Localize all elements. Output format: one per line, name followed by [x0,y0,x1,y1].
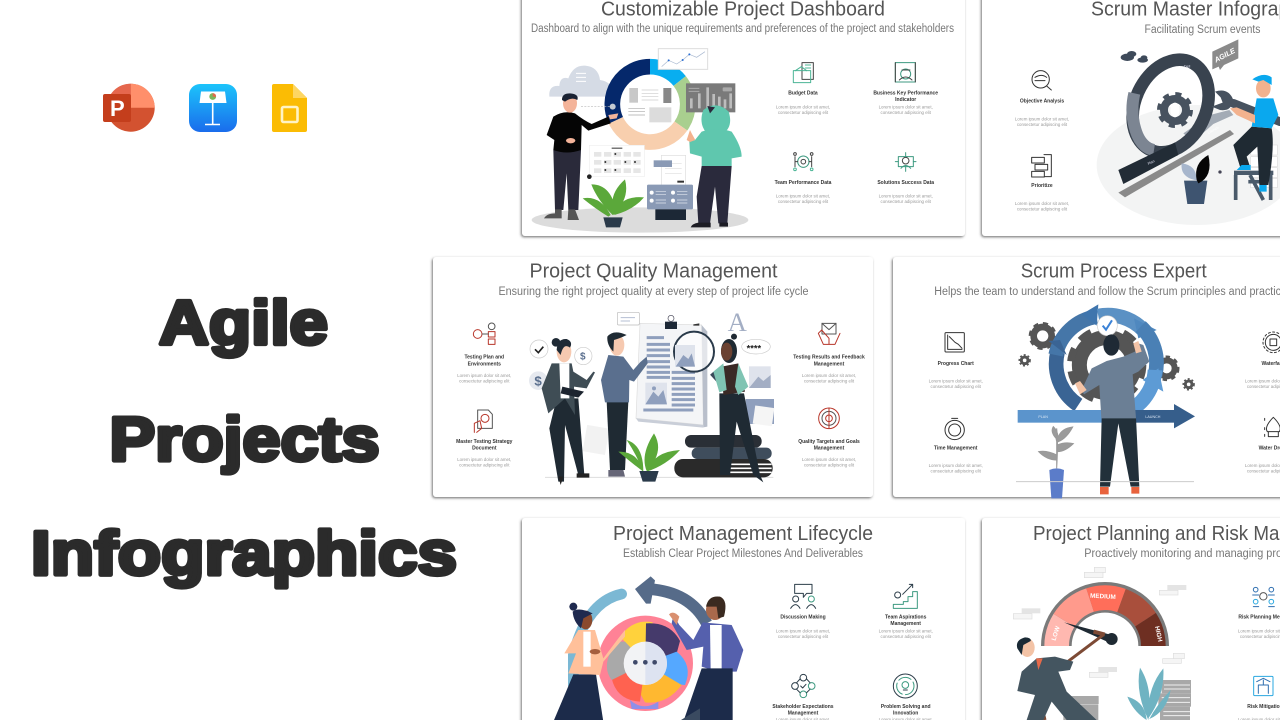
item: Team Aspirations Management: Management [890,621,921,627]
item: Time Management [929,418,983,474]
item: Progress Chart: Lorem ipsum dolor sit amet, [929,379,983,384]
title: Project Quality Management [530,260,778,282]
subtitle: Ensuring the right project quality at every step of project life cycle [498,286,808,298]
item: Progress Chart: Progress Chart [938,361,974,367]
item: Stakeholder Expectations Management: Management [788,710,819,716]
item: Objective Analysis [1015,71,1069,127]
item: Solutions Success Data [877,153,934,204]
title: Scrum Process Expert [1021,260,1207,282]
item: Business Key Performance Indicator [873,63,938,115]
item: Time Management: Lorem ipsum dolor sit amet, [929,463,983,468]
item: Discussion Making [776,584,830,639]
title: Project Management Lifecycle [613,523,873,545]
icon: risk mitigation [1254,676,1273,696]
item: Prioritize: Prioritize [1031,183,1053,189]
icon: aspirations [893,584,917,608]
item: Stakeholder Expectations Management [772,674,834,720]
item: Solutions Success Data: Solutions Success Data [877,180,934,186]
icon: KPI [895,63,915,82]
item: Testing Plan and Environments: Environments [468,361,501,367]
item: Team Aspirations Management: Team Aspirations [885,614,927,620]
item: Master Testing Strategy Document: Master Testing Strategy [456,439,513,445]
item: Prioritize: Lorem ipsum dolor sit amet, [1015,201,1069,206]
icon: Keynote [189,84,237,132]
illustration: scrum process: LAUNCH [1145,415,1161,419]
item: Team Aspirations Management: Lorem ipsum dolor sit amet, [879,628,933,633]
item: Testing Results and Feedback Management: consectetur adipiscing elit [804,378,855,383]
item: Discussion Making: Lorem ipsum dolor sit amet, [776,628,830,633]
item: Master Testing Strategy Document: consectetur adipiscing elit [459,462,510,468]
illustration: quality team: **** [747,343,762,353]
item: Problem Solving and Innovation: Innovation [893,710,918,716]
item: Prioritize [1015,155,1069,211]
item: Time Management: consectetur adipiscing elit [931,469,982,474]
illustration: scrum process: PLAN [1038,415,1048,419]
illustration: risk gauge [1013,567,1191,720]
subtitle: Dashboard to align with the unique requirements and preferences of the project and stakeholders [531,23,954,35]
icon: solutions [895,153,916,171]
item: Team Performance Data: Team Performance Data [775,180,832,186]
item: Budget Data: consectetur adipiscing elit [778,110,829,115]
item: Quality Targets and Goals Management: Lorem ipsum dolor sit amet, [802,457,856,462]
item: Problem Solving and Innovation: Problem Solving and [881,704,931,710]
icon: feedback [818,323,840,344]
item: Quality Targets and Goals Management [798,408,860,468]
item: Waterfall [1245,332,1280,389]
item: Solutions Success Data: consectetur adipiscing elit [881,199,932,204]
item: Progress Chart [929,333,983,389]
heading: Agile: Agile [159,289,328,358]
item: Discussion Making: consectetur adipiscing elit [778,634,829,639]
item: Business Key Performance Indicator: Business Key Performance [873,90,938,96]
heading: Projects: Projects [110,405,380,474]
item: Risk Mitigation [1238,676,1280,720]
panel: Project Planning and Risk Management [982,518,1280,720]
icon: Google Slides [272,84,307,132]
item: Testing Plan and Environments: Testing Plan and [464,355,504,361]
icon: document [474,410,492,432]
item: Business Key Performance Indicator: consectetur adipiscing elit [881,110,932,115]
icon: progress chart [945,333,964,352]
item: Team Performance Data [775,153,832,204]
item: Stakeholder Expectations Management: Stakeholder Expectations [772,704,834,710]
illustration: risk gauge: MEDIUM [1090,593,1116,601]
icon: PowerPoint: P [110,96,125,121]
icon: water drop [1265,417,1280,437]
subtitle: Establish Clear Project Milestones And Deliverables [623,548,863,560]
item: Discussion Making: Discussion Making [780,614,826,620]
item: Time Management: Time Management [934,445,978,451]
icon: magnifier [1032,71,1051,90]
panel: Customizable Project Dashboard [522,0,965,236]
item: Objective Analysis: Objective Analysis [1020,98,1064,104]
panel: Project Quality Management [433,257,873,497]
icon: prioritize [1032,155,1051,177]
item: Budget Data: Lorem ipsum dolor sit amet, [776,104,830,109]
illustration: scrum process [1016,304,1195,498]
item: Testing Plan and Environments: consectetur adipiscing elit [459,378,510,383]
item: Testing Results and Feedback Management: Lorem ipsum dolor sit amet, [802,373,856,378]
item: Team Performance Data: Lorem ipsum dolor sit amet, [776,194,830,198]
heading: Infographics: Infographics [31,520,457,589]
illustration: quality team [529,307,774,485]
item: Testing Plan and Environments: Lorem ipsum dolor sit amet, [457,373,511,378]
item: Testing Results and Feedback Management [793,323,865,383]
illustration: scrum wheel: AGILE [1212,45,1238,65]
item: Team Performance Data: consectetur adipiscing elit [778,199,829,204]
item: Testing Results and Feedback Management: Management [814,361,845,367]
illustration: risk gauge: HIGH [1153,626,1163,643]
icon: stopwatch [945,418,964,440]
subtitle: Facilitating Scrum events [1144,24,1261,36]
illustration: lifecycle [553,576,743,720]
icon: risk planning [1253,587,1274,607]
panel: Project Management Lifecycle [522,518,965,720]
icon: discussion [791,584,816,608]
illustration: scrum wheel: Dell [1184,64,1190,68]
illustration: scrum wheel [1097,39,1280,225]
illustration: quality team: $ [534,374,542,389]
illustration: risk gauge: LOW [1051,625,1062,642]
illustration: scrum wheel: Launch [1207,126,1219,135]
icon: target [819,408,839,429]
item: Solutions Success Data: Lorem ipsum dolor sit amet, [879,194,933,198]
item: Objective Analysis: Lorem ipsum dolor sit amet, [1015,116,1069,122]
item: Master Testing Strategy Document [456,410,513,468]
item: Quality Targets and Goals Management: consectetur adipiscing elit [804,462,855,468]
item: Team Aspirations Management: consectetur adipiscing elit [881,634,932,639]
icon: team [794,153,813,171]
item: Quality Targets and Goals Management: Quality Targets and Goals [798,439,860,445]
item: Prioritize: consectetur adipiscing elit [1017,206,1068,211]
illustration: quality team: $ [580,352,586,363]
item: Risk Planning Meeting [1238,587,1280,639]
item: Budget Data: Budget Data [788,90,818,96]
icon: maze [893,674,917,698]
item: Business Key Performance Indicator: Lorem ipsum dolor sit amet, [879,104,933,109]
illustration: scrum wheel: Plan [1147,159,1155,166]
illustration: quality team: A [728,307,748,337]
panel: Scrum Master Infographics [982,0,1280,236]
item: Team Aspirations Management [879,584,933,639]
item: Master Testing Strategy Document: Lorem ipsum dolor sit amet, [457,457,511,462]
item: Progress Chart: consectetur adipiscing elit [931,384,982,389]
item: Objective Analysis: consectetur adipiscing elit [1017,122,1068,127]
item: Master Testing Strategy Document: Document [472,446,497,452]
item: Quality Targets and Goals Management: Management [814,446,845,452]
illustration: dashboard team [532,49,748,233]
item: Business Key Performance Indicator: Indicator [895,97,916,103]
item: Testing Results and Feedback Management: Testing Results and Feedback [793,355,865,361]
icon: plan [473,323,495,344]
item: Water Drop [1245,417,1280,474]
icon: budget [793,63,813,83]
icon: stakeholder [792,674,815,698]
panel: Scrum Process Expert [893,257,1280,498]
icon: PowerPoint [103,84,155,132]
item: Problem Solving and Innovation [879,674,933,720]
item: Testing Plan and Environments [457,323,511,383]
icon: waterfall gear [1263,332,1280,353]
item: Budget Data [776,63,830,115]
